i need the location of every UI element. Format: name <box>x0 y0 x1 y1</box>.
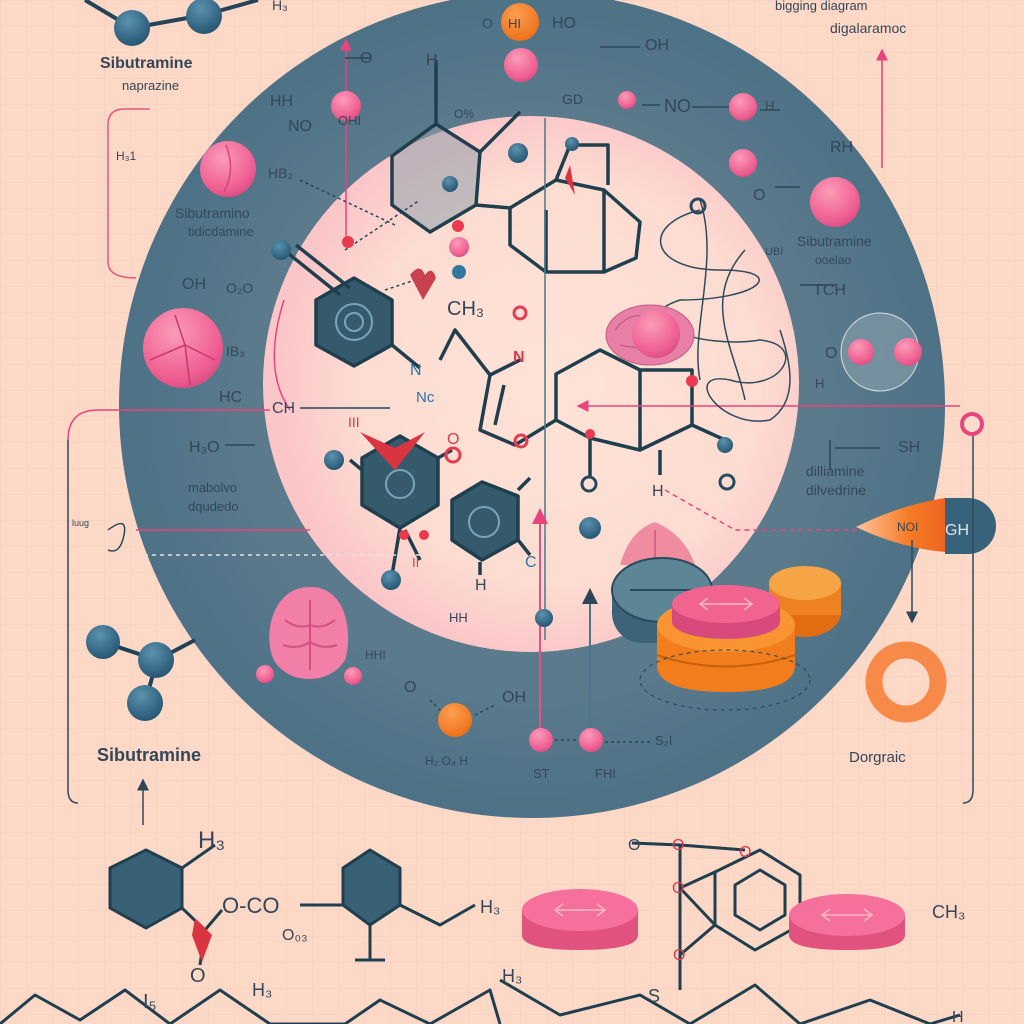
chemical labels: O₂O <box>226 280 253 296</box>
labels: mabolvo <box>188 480 237 495</box>
chemical labels: OH <box>645 37 669 54</box>
labels: dilliamine <box>806 463 865 479</box>
chemical labels: NO <box>664 96 691 116</box>
chemical labels: H₃O <box>189 439 220 456</box>
bottom chemical labels: H₃ <box>198 827 225 854</box>
chemical labels: HO <box>552 15 576 32</box>
bracket outer lines <box>68 414 982 825</box>
pill stack <box>612 522 841 710</box>
bottom chemical labels: O <box>673 947 685 964</box>
bottom chemical labels: O₀₃ <box>282 927 308 944</box>
chemical labels: III <box>348 414 360 430</box>
labels: Sibutramine <box>97 745 201 765</box>
bottom chemical labels: O <box>190 965 206 987</box>
labels <box>72 205 906 766</box>
chemical labels: NO <box>288 118 312 135</box>
capsule bullet: NOI <box>897 520 918 534</box>
chemical labels: H <box>652 483 664 500</box>
bottom chemical labels <box>143 827 965 1024</box>
chemical labels: HC <box>219 389 242 406</box>
bottom chemical labels: H₃ <box>502 966 522 986</box>
bottom molecule diagram <box>0 843 960 1024</box>
chemical labels: H <box>475 577 487 594</box>
chemical labels: C <box>525 554 537 571</box>
chemical labels: RH <box>830 139 853 156</box>
chemical labels: S₂I <box>655 733 672 748</box>
bottom pills <box>522 889 905 950</box>
atoms on structure <box>256 3 757 752</box>
chemical labels: OH <box>502 689 526 706</box>
chemical labels: HI <box>508 16 521 31</box>
chemical labels: OH <box>182 276 206 293</box>
left bracket callout: H₃1 <box>116 149 137 163</box>
chemical labels: N <box>513 349 525 366</box>
heading: top-left label <box>100 0 288 93</box>
left bracket callout <box>108 109 150 278</box>
brain icon centre <box>606 305 694 365</box>
chemical labels: H <box>426 52 438 69</box>
capsule bullet <box>856 498 996 554</box>
chemical labels: SH <box>898 439 920 456</box>
chemical labels: H <box>815 376 824 391</box>
panel: inner circle <box>263 116 799 652</box>
chemical labels: HH <box>449 610 468 625</box>
chemical labels: N <box>410 362 422 379</box>
bottom chemical labels: CH₃ <box>932 902 965 922</box>
arrow: top right <box>881 50 883 168</box>
chemical labels: II <box>412 555 419 570</box>
chemical labels: O <box>753 187 765 204</box>
bottom chemical labels: O <box>672 837 684 854</box>
heading: top-right label: digalaramoc <box>830 20 906 36</box>
spiral ribbon <box>659 200 790 421</box>
bottom chemical labels: O-CO <box>222 893 279 918</box>
chemical labels: CH₃ <box>447 298 484 320</box>
panel: outer circle <box>119 0 945 818</box>
heading: top-left label: Sibutramine <box>100 55 193 72</box>
chemical labels: CH <box>272 400 295 417</box>
chemical labels: O <box>447 431 459 448</box>
chemical labels: ST <box>533 766 550 781</box>
labels: dilvedrine <box>806 482 866 498</box>
vertical axis lines <box>68 40 960 742</box>
chemical labels: IB₃ <box>226 343 245 359</box>
bottom wedge accent <box>192 918 212 962</box>
chemical labels: Nc <box>416 389 435 406</box>
chemical labels: O% <box>454 107 474 121</box>
molecule bottom-left <box>86 625 195 721</box>
bottom chemical labels: O <box>672 880 684 897</box>
pink spheres left and right <box>143 141 860 388</box>
bottom chemical labels: I₅ <box>143 991 157 1013</box>
labels: Dorgraic <box>849 749 906 766</box>
chemical labels: O <box>404 679 416 696</box>
orange ring <box>874 650 938 714</box>
bottom chemical labels: H₃ <box>480 897 500 917</box>
labels: dqudedo <box>188 499 239 514</box>
capsule bullet: GH <box>945 522 969 539</box>
chemical labels: TCH <box>813 282 846 299</box>
chemical labels: OHI <box>338 113 361 128</box>
chemical labels: H <box>765 98 774 113</box>
bottom chemical labels: O <box>739 844 751 861</box>
brain icon lower <box>269 587 348 679</box>
top-left molecule icon <box>85 0 258 46</box>
bottom chemical labels: O <box>628 837 640 854</box>
right glass sphere with atoms <box>841 313 922 391</box>
ring details <box>336 304 499 537</box>
chemical labels: FHI <box>595 766 616 781</box>
chemical labels: O <box>825 345 837 362</box>
chemical labels <box>182 15 920 781</box>
labels: Sibutramine <box>797 233 872 249</box>
chemical labels: H₂ O₄ H <box>425 754 468 768</box>
heading: top-right label <box>775 0 906 36</box>
chemical labels: O <box>360 50 372 67</box>
chemical labels: UBI <box>765 246 783 258</box>
labels: ooelao <box>815 253 851 267</box>
chemical labels: GD <box>562 91 583 107</box>
chemical labels: HH <box>270 93 293 110</box>
chemical labels: HB₂ <box>268 165 293 181</box>
chemical labels: HHI <box>365 648 386 662</box>
heading: top-left label: naprazine <box>122 78 179 93</box>
labels: luug <box>72 518 89 528</box>
central skeleton molecule <box>284 60 725 575</box>
bottom chemical labels: S <box>648 986 660 1006</box>
labels: tidicdamine <box>188 224 254 239</box>
labels: Sibutramino <box>175 205 250 221</box>
chemical labels: O <box>482 15 493 31</box>
bottom chemical labels: H₃ <box>252 980 272 1000</box>
